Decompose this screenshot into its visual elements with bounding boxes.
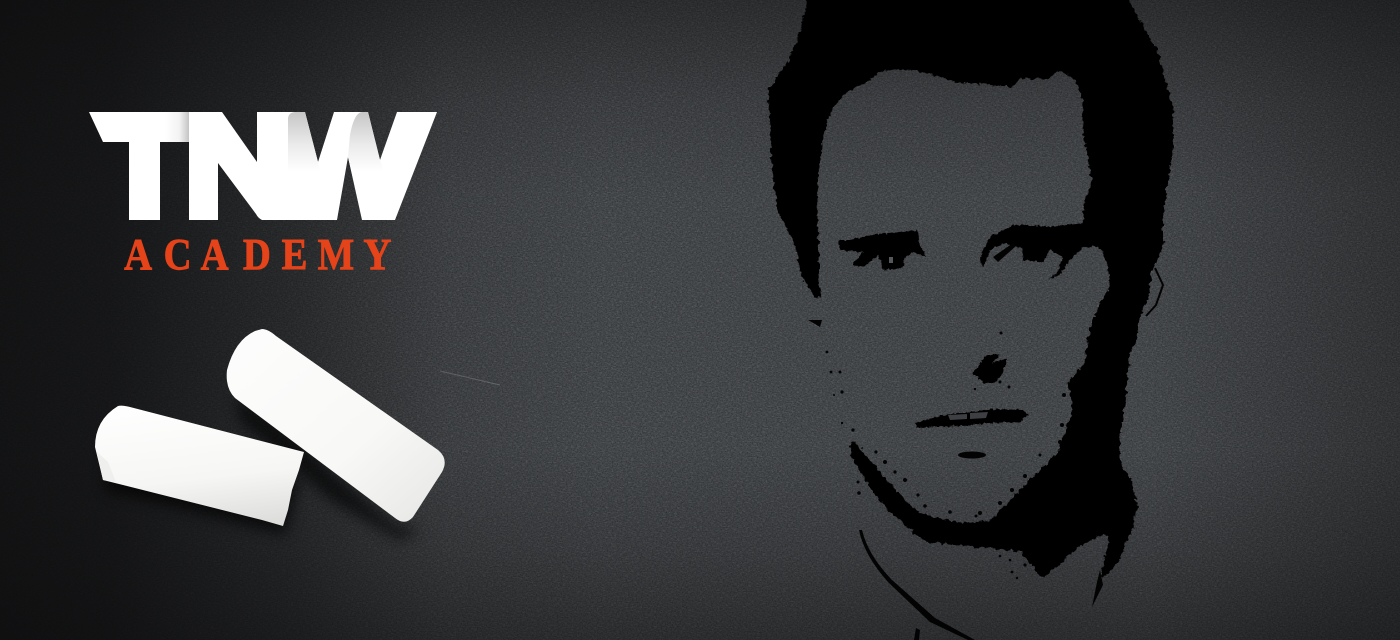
- mouth: [915, 409, 1028, 427]
- TNW Academy logo: [89, 112, 437, 279]
- stray fragment at the cheek: [808, 320, 822, 327]
- right eye and brow: [980, 223, 1095, 280]
- neck line: [859, 530, 975, 640]
- silhouette portrait: [768, 0, 1173, 640]
- chalk: left piece: [95, 406, 304, 526]
- chalk shadows: [105, 395, 420, 540]
- hair and side of the face: [768, 0, 1173, 582]
- right eye lash: [993, 243, 1016, 262]
- left eye: [838, 230, 926, 270]
- lower lip shadow: [958, 452, 986, 458]
- chalk pieces: [95, 329, 445, 540]
- left eye highlight: [889, 257, 893, 263]
- teeth: [948, 412, 988, 420]
- ear outline: [1146, 268, 1163, 316]
- logo wordmark: TNW: [89, 112, 437, 220]
- collar mark: [914, 628, 920, 640]
- logo subtitle: ACADEMY: ACADEMY: [124, 230, 391, 279]
- chalk: right piece: [227, 329, 445, 522]
- cheek and chin speckles: [826, 332, 1066, 579]
- nose: [972, 355, 1008, 383]
- chalk: worn end facet: [97, 452, 116, 482]
- tail of the jaw shadow: [1092, 570, 1103, 607]
